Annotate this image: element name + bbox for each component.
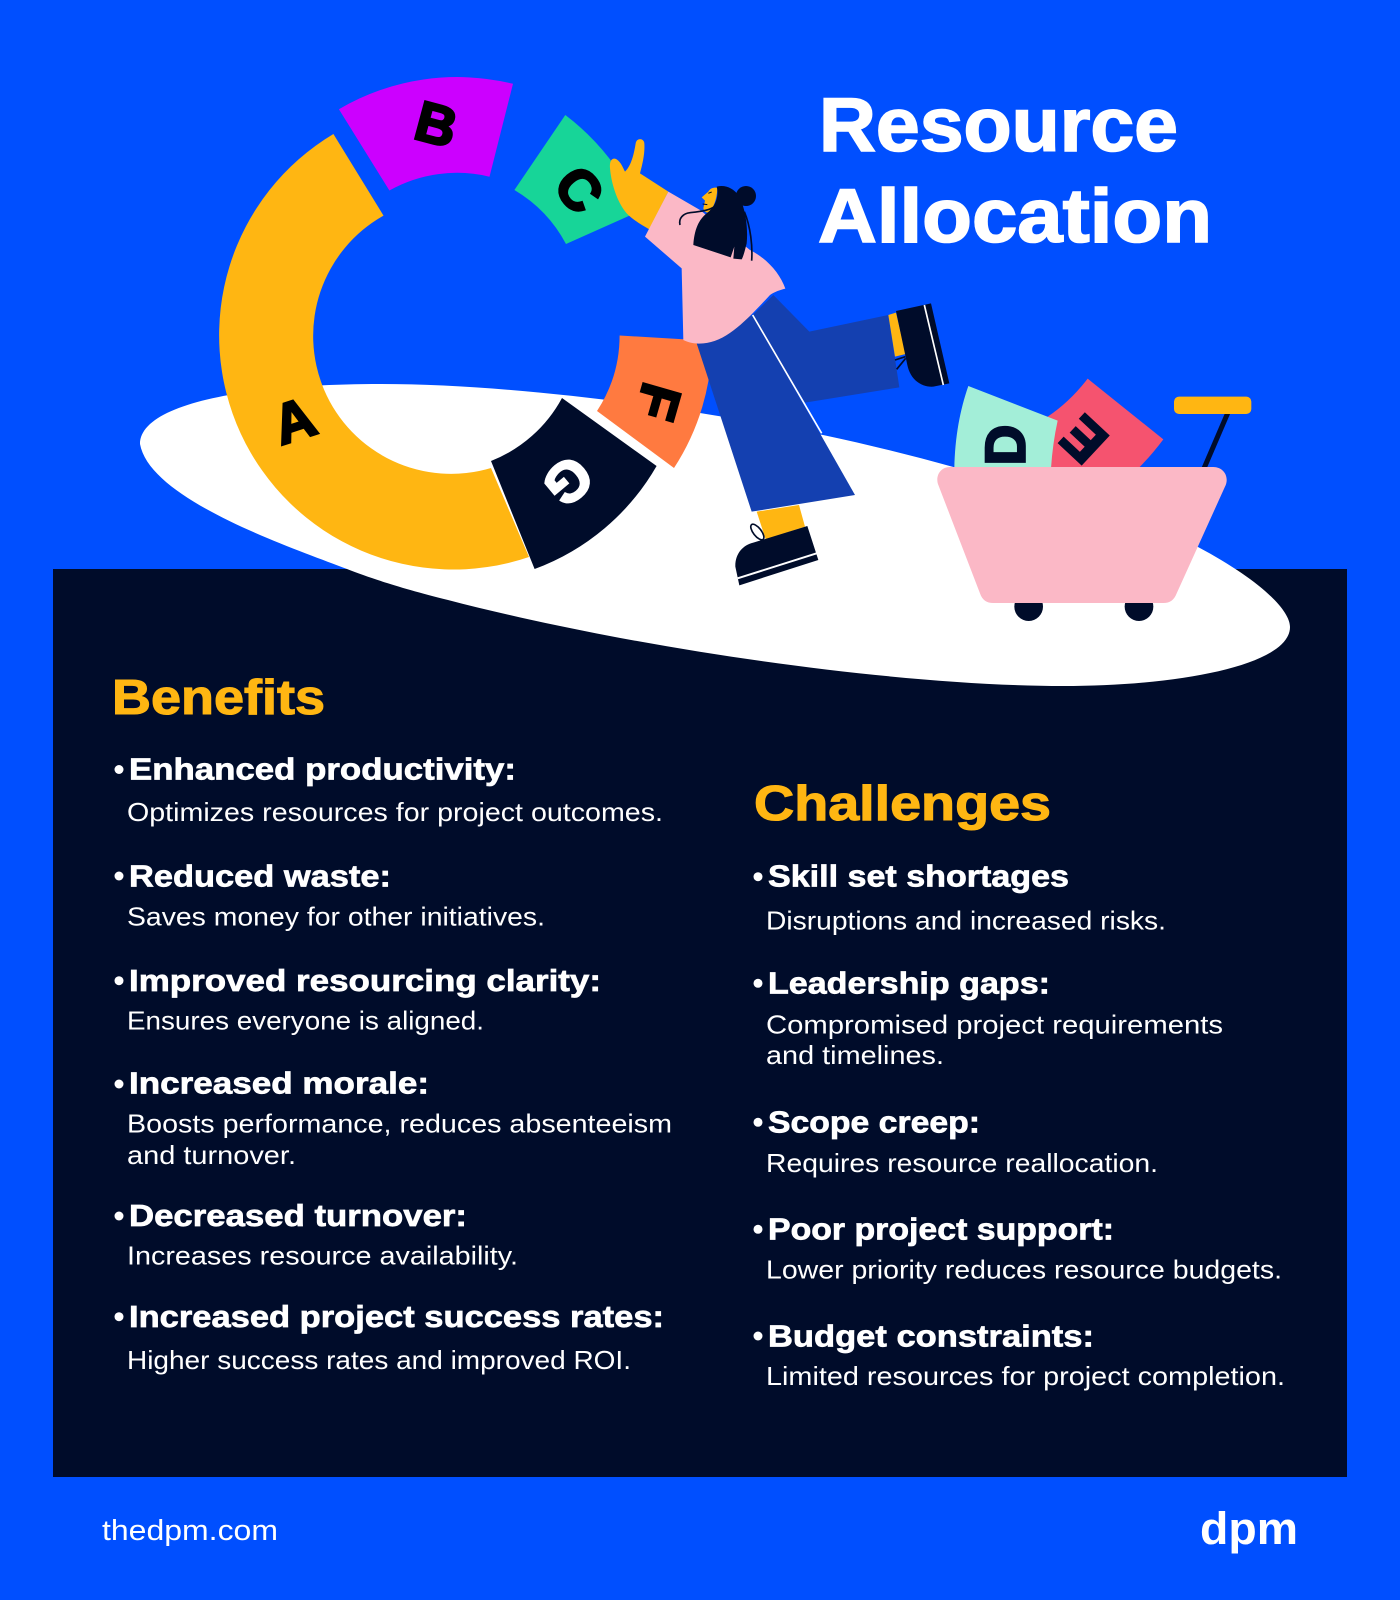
item: reduced waste: Reduced waste:	[129, 859, 391, 894]
item: skill set shortages	[754, 859, 1166, 935]
item: scope creep: Scope creep:	[768, 1104, 980, 1139]
segment D: D	[973, 425, 1036, 465]
segment A	[219, 134, 529, 570]
item: improved resourcing clarity	[114, 963, 601, 1035]
segment C: C	[542, 154, 616, 225]
footer: logo: dpm	[1200, 1503, 1298, 1554]
title: Resource	[819, 83, 1178, 168]
back ankle	[888, 313, 906, 357]
segment B	[339, 77, 513, 190]
segment F: F	[624, 377, 694, 427]
item: poor project support: Lower priority reduces resource budgets.	[766, 1255, 1282, 1285]
item: enhanced productivity	[114, 751, 663, 827]
item: increased morale: Increased morale:	[129, 1065, 429, 1100]
arm and hand	[610, 139, 668, 229]
head	[680, 186, 756, 261]
item: reduced waste	[114, 859, 545, 932]
item: leadership gaps: and timelines.	[766, 1040, 944, 1070]
back leg	[753, 295, 899, 403]
item: increased morale	[114, 1065, 672, 1170]
item: budget constraints	[754, 1319, 1285, 1391]
item: enhanced productivity: Optimizes resources for project outcomes.	[127, 797, 663, 827]
front shoe	[735, 522, 818, 585]
segment C	[514, 115, 640, 244]
item: budget constraints: Budget constraints:	[768, 1319, 1094, 1354]
footer: website: thedpm.com	[102, 1515, 278, 1547]
donut chart: resource segments	[219, 77, 712, 570]
title: Allocation	[818, 174, 1212, 259]
heading: challenges: Challenges	[754, 777, 1051, 831]
item: poor project support	[754, 1212, 1282, 1285]
item: enhanced productivity: Enhanced productivity:	[129, 751, 516, 786]
heading: benefits: Benefits	[112, 671, 325, 725]
illustration: person reaching for segment	[610, 139, 949, 585]
segment F	[597, 336, 712, 468]
panel: dark content background	[53, 569, 1347, 1477]
item: improved resourcing clarity: Improved resourcing clarity:	[129, 963, 601, 998]
item: improved resourcing clarity: Ensures everyone is aligned.	[127, 1005, 484, 1035]
segment D	[954, 386, 1058, 468]
front ankle	[757, 505, 805, 539]
item: reduced waste: Saves money for other initiatives.	[127, 902, 545, 932]
item: poor project support: Poor project support:	[768, 1212, 1114, 1247]
item: decreased turnover: Decreased turnover:	[129, 1198, 467, 1233]
front leg	[697, 315, 855, 512]
cart wheels	[1014, 592, 1153, 621]
item: budget constraints: Limited resources for project completion.	[766, 1361, 1285, 1391]
item: increased morale: and turnover.	[127, 1140, 296, 1170]
cart handle	[1174, 397, 1251, 468]
item: increased morale: Boosts performance, reduces absenteeism	[127, 1109, 672, 1139]
item: increased project success rates: Increased project success rates:	[129, 1299, 664, 1334]
segment E	[1047, 379, 1163, 475]
cart body	[937, 467, 1227, 603]
segment G: G	[531, 443, 605, 520]
segment G	[491, 398, 657, 569]
title	[818, 83, 1212, 259]
item: decreased turnover: Increases resource availability.	[127, 1240, 518, 1270]
item: scope creep: Requires resource reallocation.	[766, 1148, 1158, 1178]
back shoe	[895, 303, 949, 387]
segment A: A	[265, 384, 323, 457]
item: skill set shortages: Skill set shortages	[768, 859, 1069, 894]
item: increased project success rates: Higher success rates and improved ROI.	[127, 1345, 631, 1375]
column: benefits	[112, 671, 672, 1375]
item: skill set shortages: Disruptions and increased risks.	[766, 905, 1166, 935]
item: leadership gaps	[754, 965, 1223, 1070]
illustration: cart with segments D and E	[937, 379, 1251, 621]
item: scope creep	[754, 1104, 1158, 1178]
column: challenges	[754, 777, 1285, 1391]
white ground blob	[140, 384, 1290, 686]
segment B: B	[409, 89, 464, 160]
item: leadership gaps: Leadership gaps:	[768, 965, 1050, 1000]
segment E: E	[1049, 404, 1119, 475]
item: decreased turnover	[114, 1198, 518, 1270]
item: leadership gaps: Compromised project requirements	[766, 1009, 1223, 1039]
item: increased project success rates	[114, 1299, 664, 1375]
shirt	[645, 192, 785, 344]
